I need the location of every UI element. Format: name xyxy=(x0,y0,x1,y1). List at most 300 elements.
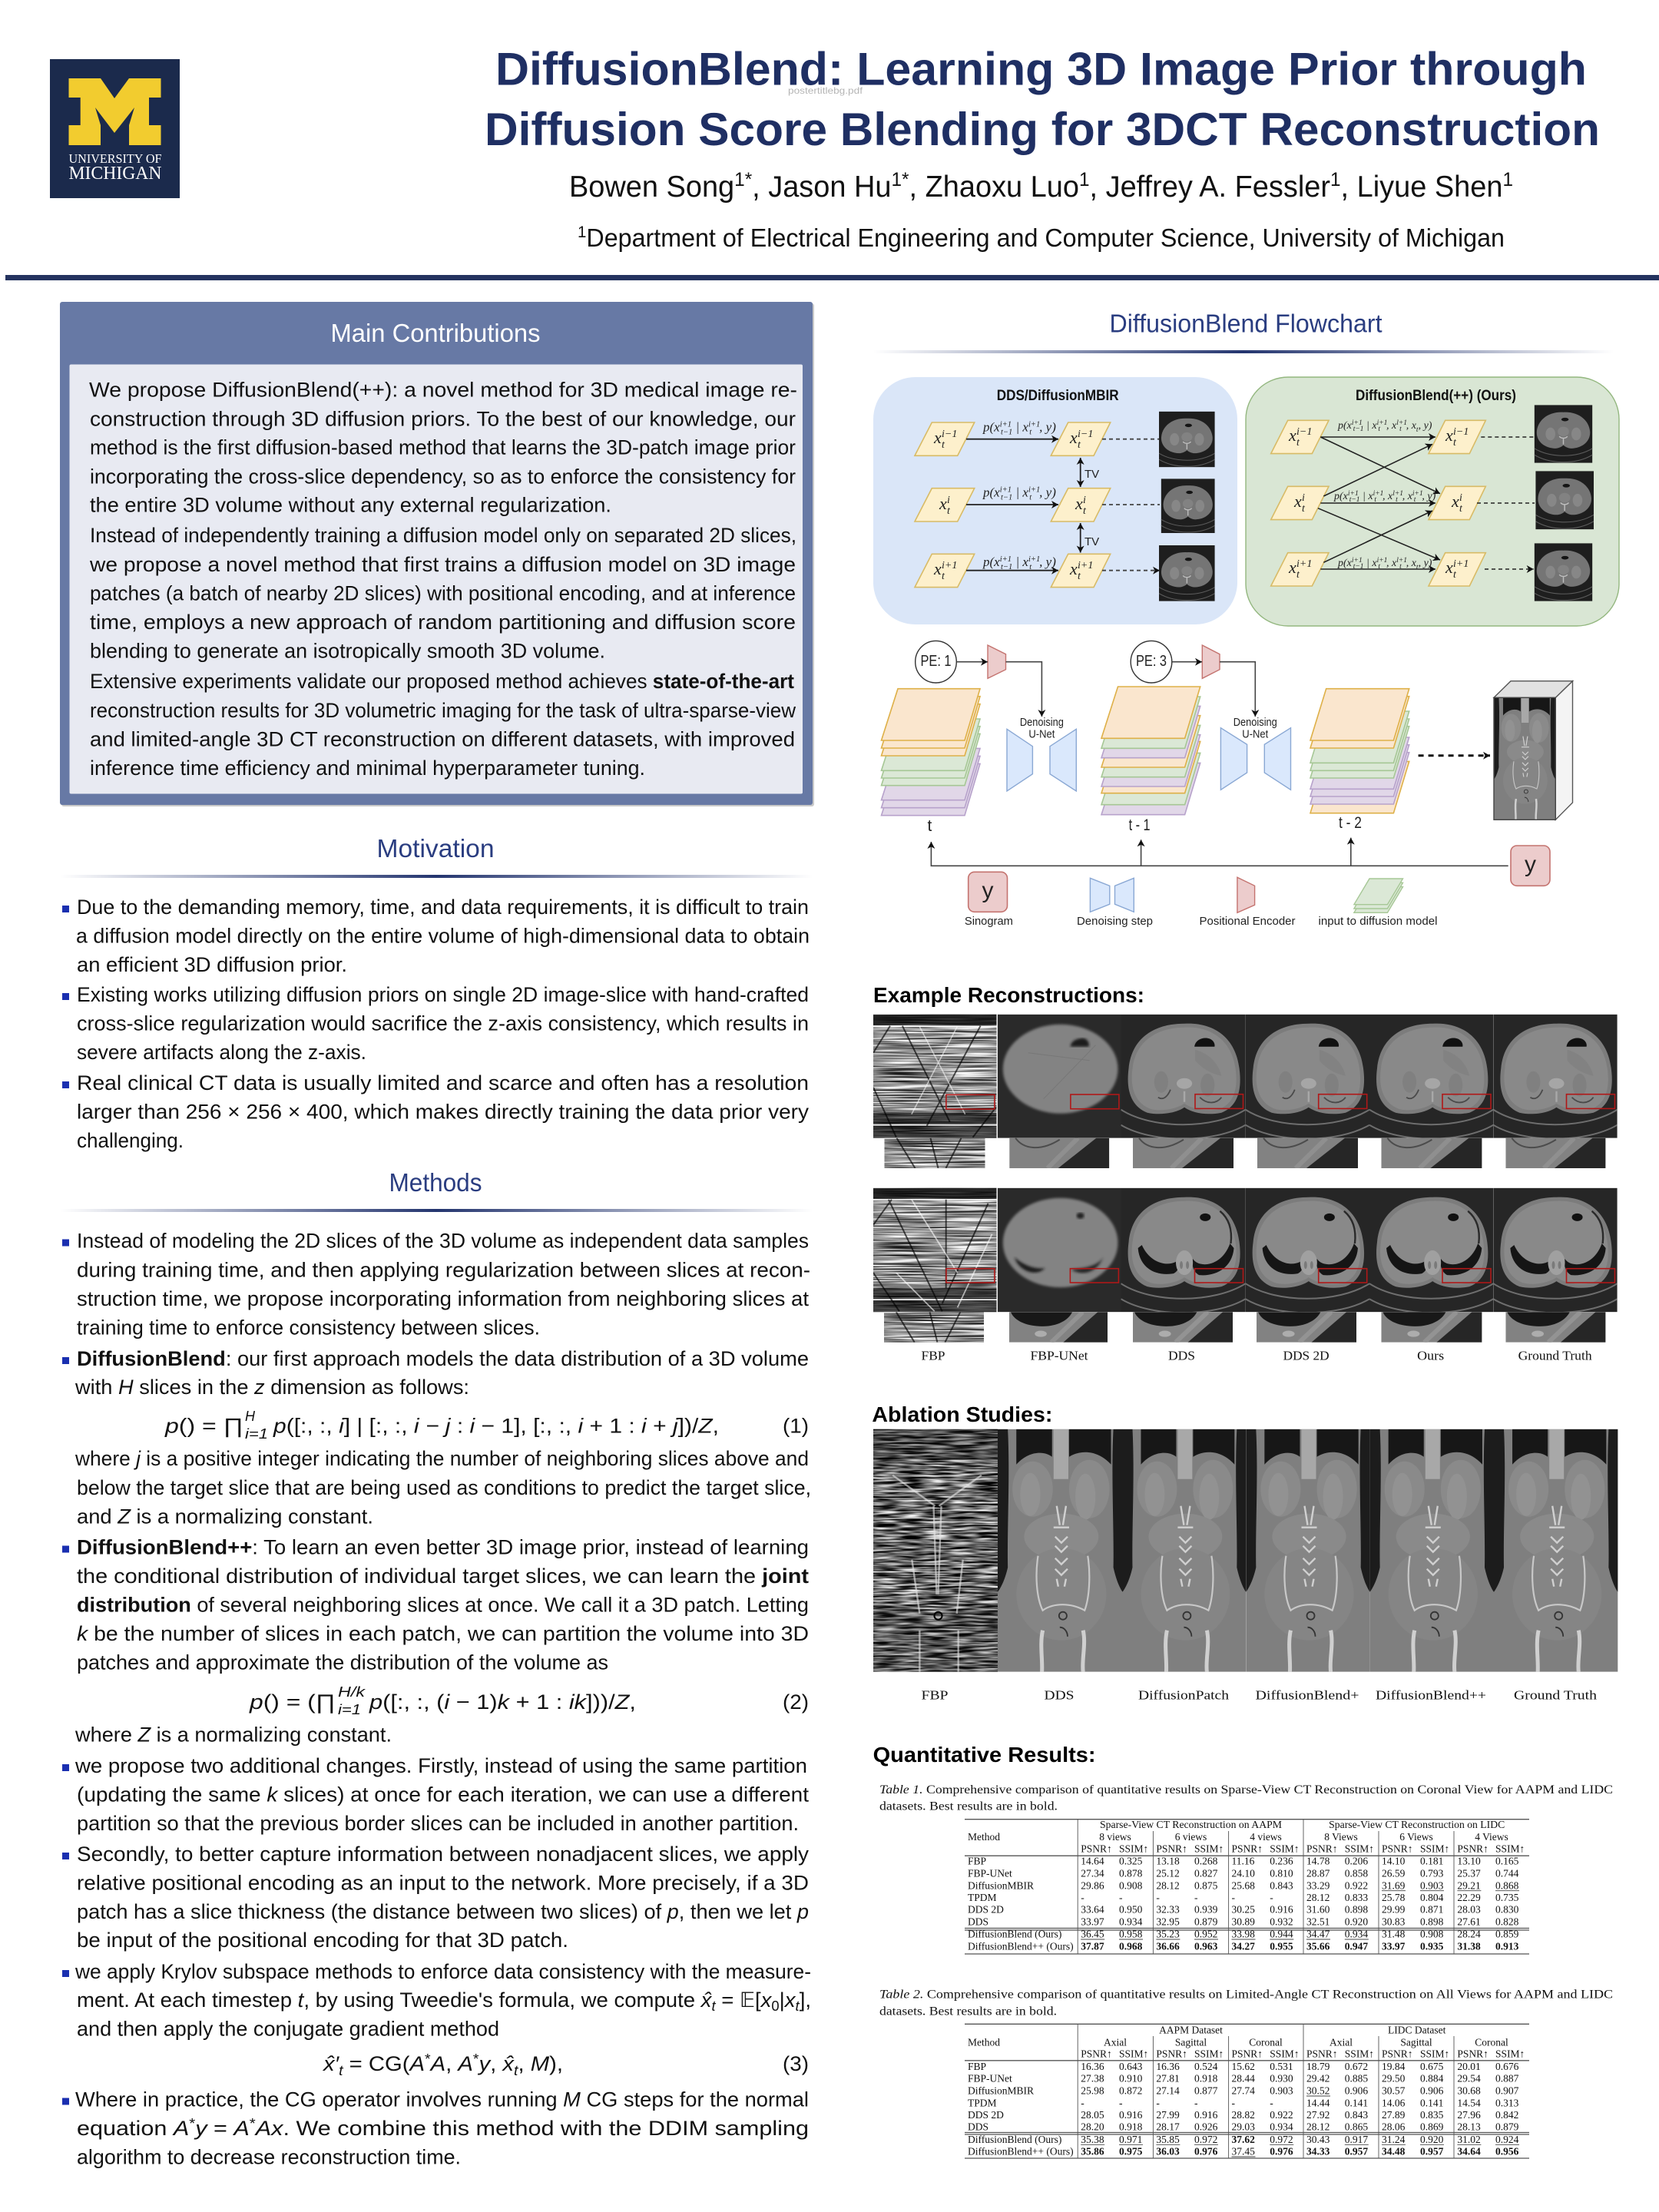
text: methods bullets: and Z is a normalizing constant. xyxy=(77,1505,373,1528)
data rows: 25.12 xyxy=(1156,1867,1180,1879)
conditional labels: t xyxy=(1396,496,1398,504)
data rows: 0.672 xyxy=(1345,2061,1368,2072)
data rows: - xyxy=(1232,1892,1235,1903)
equation 3: * xyxy=(425,2051,431,2067)
equation 3: x̂′ xyxy=(322,2052,339,2075)
conditional labels: t xyxy=(1399,426,1402,433)
slice labels: x xyxy=(939,494,947,513)
data rows: 0.206 xyxy=(1345,1856,1368,1867)
header rows: SSIM↑ xyxy=(1119,2048,1148,2059)
legend: positional encoder xyxy=(1200,877,1296,928)
background file label: postertitlebg.pdf xyxy=(788,85,863,96)
text: methods bullets: = 𝔼[ xyxy=(716,1988,761,2012)
stack t-1 xyxy=(1101,687,1200,815)
heading: flowchart: DiffusionBlend Flowchart xyxy=(1109,310,1382,338)
data rows: 0.268 xyxy=(1194,1856,1218,1867)
equation 2: p([:, :, ( i − 1) k + 1 : ik]))/Z, xyxy=(369,1690,636,1714)
data rows: 31.48 xyxy=(1382,1929,1406,1940)
data rows: 0.907 xyxy=(1495,2085,1519,2097)
text: methods bullets: the conditional distribution of individual target slices, we can learn the joint xyxy=(77,1565,809,1588)
data rows: 0.955 xyxy=(1270,1941,1293,1952)
header rows: LIDC Dataset xyxy=(1388,2024,1446,2035)
data rows: 14.44 xyxy=(1306,2097,1330,2108)
header rows: Coronal xyxy=(1249,2036,1283,2048)
conditional labels: , y) xyxy=(1419,420,1432,432)
text: methods bullets: Where in practice, the CG operator involves running M CG steps for the normal xyxy=(75,2088,809,2111)
data rows: 0.934 xyxy=(1345,1929,1368,1940)
data rows: 28.03 xyxy=(1457,1904,1481,1916)
data rows: 0.920 xyxy=(1420,2134,1444,2145)
captions: ablation studies: DiffusionPatch xyxy=(1138,1687,1230,1702)
data rows: 0.859 xyxy=(1495,1929,1519,1940)
sinogram box xyxy=(1511,846,1550,886)
data rows: 37.45 xyxy=(1232,2146,1255,2157)
data rows: - xyxy=(1270,2097,1273,2108)
text: methods bullets: x xyxy=(760,1988,773,2012)
U-Net labels: Denoising xyxy=(1020,716,1064,729)
data rows: 0.939 xyxy=(1194,1904,1218,1916)
data rows: DDS 2D xyxy=(968,2109,1004,2121)
text: contributions body: method is the first diffusion-based method that learns the 3D-patch image prior xyxy=(90,436,796,459)
data rows: 0.916 xyxy=(1119,2109,1143,2121)
equation 1: (1) xyxy=(783,1415,809,1438)
data rows: 0.828 xyxy=(1495,1916,1519,1928)
conditional labels: , y) xyxy=(1039,555,1056,569)
header rows: SSIM↑ xyxy=(1420,1843,1449,1855)
text: methods bullets: where j is a positive integer indicating the number of neighboring slices above and xyxy=(75,1447,809,1470)
slice labels: t xyxy=(947,505,951,517)
slice labels: x xyxy=(933,559,942,578)
header rows: SSIM↑ xyxy=(1270,1843,1300,1855)
text: methods bullets: (updating the same k slices) at once for each iteration, we can use a different xyxy=(77,1783,810,1806)
data rows: 0.675 xyxy=(1420,2061,1444,2072)
data rows: 0.908 xyxy=(1119,1879,1143,1891)
data rows: 25.78 xyxy=(1382,1892,1406,1903)
caption: table 2: datasets. Best results are in bold. xyxy=(879,2005,1057,2018)
data rows: 30.68 xyxy=(1457,2085,1481,2097)
data rows: 0.934 xyxy=(1119,1916,1143,1928)
text: contributions body: reconstruction results for 3D volumetric imaging for the task of ultra-sparse-view xyxy=(90,699,796,722)
data rows: 33.64 xyxy=(1081,1904,1104,1916)
timestep labels: t - 2 xyxy=(1339,814,1362,832)
TV labels: TV xyxy=(1084,535,1099,548)
caption: table 2: Table 2. Comprehensive comparison of quantitative results on Limited-Angle CT Reconstruction on All Views for AAPM and LIDC xyxy=(879,1988,1613,2002)
header rows: PSNR↑ xyxy=(1457,1843,1488,1855)
conditional labels: t−1 xyxy=(1001,494,1012,502)
data rows: 0.879 xyxy=(1194,1916,1218,1928)
conditional labels: , y) xyxy=(1039,485,1056,500)
data rows: 18.79 xyxy=(1306,2061,1330,2072)
captions: example reconstructions xyxy=(922,1349,1592,1363)
data rows: 37.87 xyxy=(1081,1941,1104,1952)
data rows: 0.878 xyxy=(1119,1867,1143,1879)
figure: example reconstructions row 1 xyxy=(873,1015,1618,1168)
data rows: 16.36 xyxy=(1156,2061,1180,2072)
data rows: 25.98 xyxy=(1081,2085,1104,2097)
slice labels: i xyxy=(1302,492,1305,504)
text: contributions body: Instead of independently training a diffusion model only on separated 2D slices, xyxy=(90,524,796,547)
affiliation: 1 xyxy=(578,224,586,241)
slice labels: t xyxy=(1302,503,1306,515)
data rows: 28.12 xyxy=(1306,2121,1330,2132)
data rows: 28.87 xyxy=(1306,1867,1330,1879)
equation 3: t xyxy=(339,2063,344,2078)
caption: table 1: Table 1. Comprehensive comparison of quantitative results on Sparse-View CT Reconstruction on Coronal View for AAPM and LIDC xyxy=(879,1783,1613,1796)
captions: ablation studies: FBP xyxy=(922,1687,948,1702)
conditional labels: t−1 xyxy=(1349,496,1360,504)
data rows: 28.20 xyxy=(1081,2121,1104,2132)
logo wordmark: MICHIGAN xyxy=(69,164,161,184)
data rows: - xyxy=(1194,2097,1198,2108)
authors: , Zhaoxu Luo xyxy=(909,171,1079,204)
equation 3: (3) xyxy=(783,2052,809,2075)
header rows xyxy=(968,1819,1525,1855)
slice labels: t xyxy=(1453,569,1457,581)
data rows: 0.918 xyxy=(1194,2073,1218,2085)
CT slices xyxy=(1535,405,1594,601)
data rows: 26.59 xyxy=(1382,1867,1406,1879)
text: methods bullets: where Z is a normalizing constant. xyxy=(75,1724,392,1747)
conditional labels: t−1 xyxy=(1001,563,1012,571)
text: contributions body: patches (a batch of nearby 2D slices) with positional encoding, and at inference xyxy=(90,582,796,605)
equation 1: H xyxy=(245,1409,256,1424)
data rows: 0.934 xyxy=(1270,2121,1293,2132)
positional encoders: PE: 3 xyxy=(1136,653,1167,670)
title: Diffusion Score Blending for 3DCT Reconstruction xyxy=(485,104,1600,155)
data rows: 0.531 xyxy=(1270,2061,1293,2072)
data rows: 29.50 xyxy=(1382,2073,1406,2085)
slice labels: i−1 xyxy=(942,429,957,440)
slice labels: t xyxy=(1078,571,1081,582)
conditional labels: i+1 xyxy=(1000,555,1012,564)
data rows: 29.86 xyxy=(1081,1879,1104,1891)
header rows: PSNR↑ xyxy=(1156,2048,1187,2059)
data rows: 16.36 xyxy=(1081,2061,1104,2072)
slice labels: t xyxy=(1296,569,1300,581)
data rows: 0.968 xyxy=(1119,1941,1143,1952)
header rows: SSIM↑ xyxy=(1270,2048,1300,2059)
header rows: Method xyxy=(968,2036,1000,2048)
data rows: 29.99 xyxy=(1382,1904,1406,1916)
text: contributions body: inference time efficiency and minimal hyperparameter tuning. xyxy=(90,757,645,780)
header rows: SSIM↑ xyxy=(1345,2048,1374,2059)
header rows: 8 Views xyxy=(1324,1831,1358,1843)
equation 3 xyxy=(322,2051,809,2078)
text: methods bullets: t xyxy=(796,1998,800,2014)
slice labels: i−1 xyxy=(1453,426,1469,438)
zoom boxes xyxy=(946,1094,1614,1109)
slice labels: x xyxy=(1293,492,1302,511)
data rows: 0.885 xyxy=(1345,2073,1368,2085)
equation 2: H/k xyxy=(338,1684,366,1700)
data rows: 27.61 xyxy=(1457,1916,1481,1928)
conditional labels: l+1 xyxy=(1392,490,1403,498)
header rows: PSNR↑ xyxy=(1081,2048,1112,2059)
arrows to U-Nets xyxy=(957,662,1255,717)
data rows: 11.16 xyxy=(1232,1856,1255,1867)
logo: University of Michigan xyxy=(50,59,180,198)
title xyxy=(485,43,1600,155)
conditional labels: , y) xyxy=(1039,420,1056,435)
sinogram box: y xyxy=(1525,852,1536,877)
data rows: 0.875 xyxy=(1194,1879,1218,1891)
conditional labels: i+1 xyxy=(1352,419,1363,427)
slice labels: i xyxy=(947,495,950,506)
data rows: FBP-UNet xyxy=(968,1867,1012,1879)
data rows: 33.97 xyxy=(1081,1916,1104,1928)
data rows: 0.918 xyxy=(1119,2121,1143,2132)
data rows: 0.950 xyxy=(1119,1904,1143,1916)
data rows: 25.68 xyxy=(1232,1879,1255,1891)
text: methods bullets: 0 xyxy=(771,1998,780,2014)
data rows: DiffusionBlend (Ours) xyxy=(968,1929,1061,1940)
affiliation: Department of Electrical Engineering and Computer Science, University of Michigan xyxy=(586,224,1505,252)
text: motivation bullets: an efficient 3D diffusion prior. xyxy=(77,953,347,976)
data rows: 30.52 xyxy=(1306,2085,1330,2097)
captions: example reconstructions: DDS xyxy=(1168,1349,1195,1363)
data rows: 30.83 xyxy=(1382,1916,1406,1928)
authors: Bowen Song xyxy=(569,171,739,204)
panel: DiffusionBlend(++) flow xyxy=(1246,377,1619,626)
authors: , Liyue Shen xyxy=(1341,171,1502,204)
data rows: 35.66 xyxy=(1306,1941,1330,1952)
header divider xyxy=(5,275,1659,280)
data rows: 30.57 xyxy=(1382,2085,1406,2097)
data rows: 0.842 xyxy=(1495,2109,1518,2121)
data rows: DiffusionBlend++ (Ours) xyxy=(968,2146,1074,2157)
text: contributions body: Extensive experiments validate our proposed method achieves state-of-the-art xyxy=(90,670,794,693)
data rows: 0.971 xyxy=(1119,2134,1142,2145)
equation 2: (2) xyxy=(783,1690,809,1714)
conditional labels xyxy=(1333,419,1436,571)
slice labels: i+1 xyxy=(1078,560,1093,571)
data rows: 0.744 xyxy=(1495,1867,1519,1879)
text: methods bullets: algorithm to decrease reconstruction time. xyxy=(77,2146,461,2169)
text: methods bullets: | xyxy=(780,1988,785,2012)
data rows: 0.906 xyxy=(1420,2085,1444,2097)
text: motivation bullets: a diffusion model directly on the entire volume of high-dimensional data to obtain xyxy=(76,925,810,948)
header rows xyxy=(968,2024,1525,2059)
data rows: TPDM xyxy=(968,1892,997,1903)
data rows: 33.29 xyxy=(1306,1879,1330,1891)
stack t-2 xyxy=(1310,689,1409,813)
timestep labels xyxy=(927,814,1362,835)
data rows: 29.42 xyxy=(1306,2073,1330,2085)
data rows: 33.98 xyxy=(1232,1929,1255,1940)
conditional labels: , y) xyxy=(1419,558,1432,569)
equation 3: A xyxy=(408,2052,425,2075)
header rows: PSNR↑ xyxy=(1382,2048,1413,2059)
3D volume xyxy=(1494,681,1573,820)
caption: table 1 xyxy=(879,1783,1613,1813)
data rows: 0.906 xyxy=(1345,2085,1368,2097)
text: motivation bullets xyxy=(62,896,810,1152)
data rows: 0.313 xyxy=(1495,2097,1519,2108)
header rows: PSNR↑ xyxy=(1457,2048,1488,2059)
equation 1 xyxy=(164,1409,809,1442)
equation 3: * xyxy=(473,2051,479,2067)
data rows: DiffusionBlend++ (Ours) xyxy=(968,1941,1074,1952)
data rows: 0.524 xyxy=(1194,2061,1218,2072)
text: contributions body: we propose a novel method that first trains a diffusion model on 3D image xyxy=(89,553,796,576)
text: methods bullets: Instead of modeling the 2D slices of the 3D volume as independent data samples xyxy=(77,1230,809,1253)
data rows: 29.03 xyxy=(1232,2121,1255,2132)
text: methods bullets: * xyxy=(250,2116,256,2131)
data rows: 28.12 xyxy=(1156,1879,1180,1891)
header rows: SSIM↑ xyxy=(1194,2048,1224,2059)
data rows: 0.141 xyxy=(1420,2097,1443,2108)
header rows: PSNR↑ xyxy=(1156,1843,1187,1855)
authors: * xyxy=(902,169,909,190)
text: methods bullets: t xyxy=(711,1998,717,2014)
data rows: 0.932 xyxy=(1270,1916,1293,1928)
data rows: 36.03 xyxy=(1156,2146,1180,2157)
conditional labels: , x xyxy=(1386,558,1397,569)
data rows: 35.38 xyxy=(1081,2134,1104,2145)
zoom crops xyxy=(884,1312,1605,1343)
slice labels xyxy=(933,428,1093,582)
data rows: 29.54 xyxy=(1457,2073,1481,2085)
data rows: 35.23 xyxy=(1156,1929,1180,1940)
conditional labels: | x xyxy=(1012,555,1028,569)
conditional labels: p(x xyxy=(983,420,1000,435)
text: motivation bullets: Real clinical CT data is usually limited and scarce and often has a resolution xyxy=(77,1071,809,1094)
text: contributions body: We propose DiffusionBlend(++): a novel method for 3D medical image re- xyxy=(89,379,797,402)
heading: quantitative results: Quantitative Results: xyxy=(873,1743,1096,1767)
text: methods bullets: Ax xyxy=(253,2117,284,2140)
captions: example reconstructions: Ours xyxy=(1417,1349,1444,1363)
positional encoders: PE: 1 xyxy=(920,653,951,670)
slice labels: t xyxy=(942,571,945,582)
data rows: 0.871 xyxy=(1420,1904,1443,1916)
conditional labels: i+1 xyxy=(1373,490,1383,498)
text: methods bullets: = A xyxy=(213,2117,247,2140)
data rows: 31.60 xyxy=(1306,1904,1330,1916)
text: methods bullets: patch has a slice thickness (the distance between two slices) of p, then we let p xyxy=(77,1900,809,1923)
data rows: 28.17 xyxy=(1156,2121,1180,2132)
text: methods bullets: equation A xyxy=(77,2117,187,2140)
data rows: 27.81 xyxy=(1156,2073,1180,2085)
equation 1: p() = ∏ xyxy=(164,1415,243,1438)
data rows: 28.06 xyxy=(1382,2121,1406,2132)
authors: 1 xyxy=(734,169,745,190)
data rows: 0.922 xyxy=(1270,2109,1293,2121)
text: contributions body: time, employs a new approach of random partitioning and diffusion score xyxy=(90,611,796,634)
header rows: SSIM↑ xyxy=(1495,2048,1525,2059)
text: methods bullets: Secondly, to better capture information between nonadjacent slices, we apply xyxy=(77,1843,810,1866)
data rows: 30.43 xyxy=(1306,2134,1330,2145)
header rows: 6 views xyxy=(1175,1831,1207,1843)
conditional labels: t xyxy=(1029,563,1032,571)
header rows: Coronal xyxy=(1475,2036,1508,2048)
data rows: 34.27 xyxy=(1232,1941,1255,1952)
text: methods bullets: partition so that the previous border slices can be included in another partition. xyxy=(77,1812,799,1835)
slice labels: i xyxy=(1083,495,1086,506)
data rows: 34.48 xyxy=(1382,2146,1406,2157)
slice labels: t xyxy=(1453,437,1457,449)
text: methods bullets: k be the number of slices in each patch, we can partition the volume into 3D xyxy=(77,1622,809,1645)
conditional labels: , x xyxy=(1402,491,1413,502)
header rows: Method xyxy=(968,1831,1000,1843)
slice labels: i+1 xyxy=(1453,558,1469,570)
data rows: 34.33 xyxy=(1306,2146,1330,2157)
stack t xyxy=(882,689,980,816)
data rows: 0.884 xyxy=(1420,2073,1444,2085)
data rows: DDS xyxy=(968,1916,988,1928)
legend: denoising step: Denoising step xyxy=(1077,915,1153,928)
U-Net labels xyxy=(1020,716,1277,741)
legend: denoising step xyxy=(1077,878,1153,928)
data rows: FBP xyxy=(968,1856,986,1867)
header rows: Axial xyxy=(1330,2036,1353,2048)
input slices xyxy=(1271,420,1485,586)
conditional labels: t xyxy=(1416,426,1419,434)
text: methods bullets: relative positional encoding as an input to the network. More precisely, if a 3D xyxy=(77,1872,809,1895)
data rows: 0.976 xyxy=(1270,2146,1293,2157)
header rows: 6 Views xyxy=(1399,1831,1433,1843)
equation 3: y xyxy=(477,2052,492,2075)
text: methods bullets: and then apply the conjugate gradient method xyxy=(77,2017,499,2040)
conditional labels: l+1 xyxy=(1396,557,1407,565)
conditional labels: i+1 xyxy=(1412,490,1423,498)
logo wordmark xyxy=(69,151,161,184)
captions: ablation studies: DiffusionBlend+ xyxy=(1255,1687,1359,1702)
conditional labels: i+1 xyxy=(1352,557,1363,565)
conditional labels: i+1 xyxy=(1028,555,1040,564)
data rows: 0.963 xyxy=(1194,1941,1218,1952)
caption: table 2 xyxy=(879,1988,1613,2018)
timestep labels: t xyxy=(927,817,932,835)
equation 3: t xyxy=(514,2063,519,2078)
data rows: 0.877 xyxy=(1194,2085,1218,2097)
data rows: 32.95 xyxy=(1156,1916,1180,1928)
data rows: 30.89 xyxy=(1232,1916,1255,1928)
text: motivation bullets: challenging. xyxy=(77,1129,184,1152)
U-Net labels: U-Net xyxy=(1028,728,1055,741)
data rows: 0.868 xyxy=(1495,1879,1519,1891)
conditional labels: p(x xyxy=(1338,420,1352,432)
data rows: 0.804 xyxy=(1420,1892,1444,1903)
data rows: - xyxy=(1156,1892,1160,1903)
equation 3: , A xyxy=(445,2052,472,2075)
data rows: DDS xyxy=(968,2121,988,2132)
conditional labels: t−1 xyxy=(1001,429,1012,437)
data rows: 14.10 xyxy=(1382,1856,1406,1867)
zoom boxes xyxy=(946,1269,1614,1283)
text: methods bullets: we propose two additional changes. Firstly, instead of using the same partition xyxy=(75,1754,807,1777)
header rows: PSNR↑ xyxy=(1382,1843,1413,1855)
data rows: 0.908 xyxy=(1420,1929,1444,1940)
captions: example reconstructions: FBP xyxy=(922,1349,945,1363)
data rows: - xyxy=(1232,2097,1235,2108)
header rows: Axial xyxy=(1104,2036,1127,2048)
data rows: DiffusionMBIR xyxy=(968,2085,1034,2097)
data rows: 25.37 xyxy=(1457,1867,1481,1879)
data rows: 0.869 xyxy=(1420,2121,1444,2132)
data rows: DiffusionBlend (Ours) xyxy=(968,2134,1061,2145)
data rows: 0.827 xyxy=(1194,1867,1218,1879)
header rows: SSIM↑ xyxy=(1495,1843,1525,1855)
header rows: 8 views xyxy=(1099,1831,1131,1843)
figure: example reconstructions row 2 xyxy=(873,1188,1618,1343)
data rows: DDS 2D xyxy=(968,1904,1004,1916)
equation 2 xyxy=(249,1684,809,1717)
equation 1: p([:, :, i] | [:, :, i − j : i − 1], [:, :, i + 1 : i + j])/Z, xyxy=(273,1415,719,1438)
data rows: 29.21 xyxy=(1457,1879,1481,1891)
legend: input to diffusion model: input to diffusion model xyxy=(1318,915,1438,928)
timestep labels: t - 1 xyxy=(1129,816,1151,834)
conditional labels: p(x xyxy=(983,485,1000,500)
